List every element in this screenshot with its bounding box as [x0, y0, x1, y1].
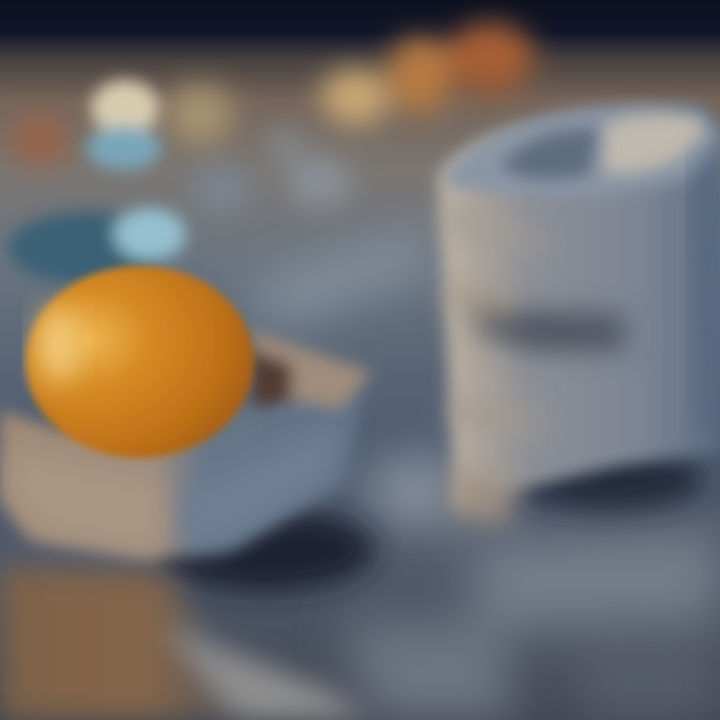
box	[0, 330, 372, 560]
dark shadows under objects	[155, 450, 705, 592]
sphere highlight	[38, 307, 78, 383]
blue dish	[8, 208, 186, 284]
cup right edge	[695, 150, 720, 440]
cup base glow	[452, 470, 515, 525]
distant left objects	[10, 85, 352, 216]
box front blue face	[185, 415, 345, 550]
distant orange objects	[321, 22, 534, 125]
cup bands	[445, 205, 625, 435]
box front beige face	[10, 450, 160, 550]
orange sphere	[26, 266, 254, 458]
cup rim	[445, 109, 720, 196]
box flap	[250, 330, 372, 410]
reflection on table	[0, 565, 370, 720]
distant pale jar	[86, 80, 162, 170]
cup	[438, 104, 720, 525]
floor highlights	[240, 230, 720, 720]
